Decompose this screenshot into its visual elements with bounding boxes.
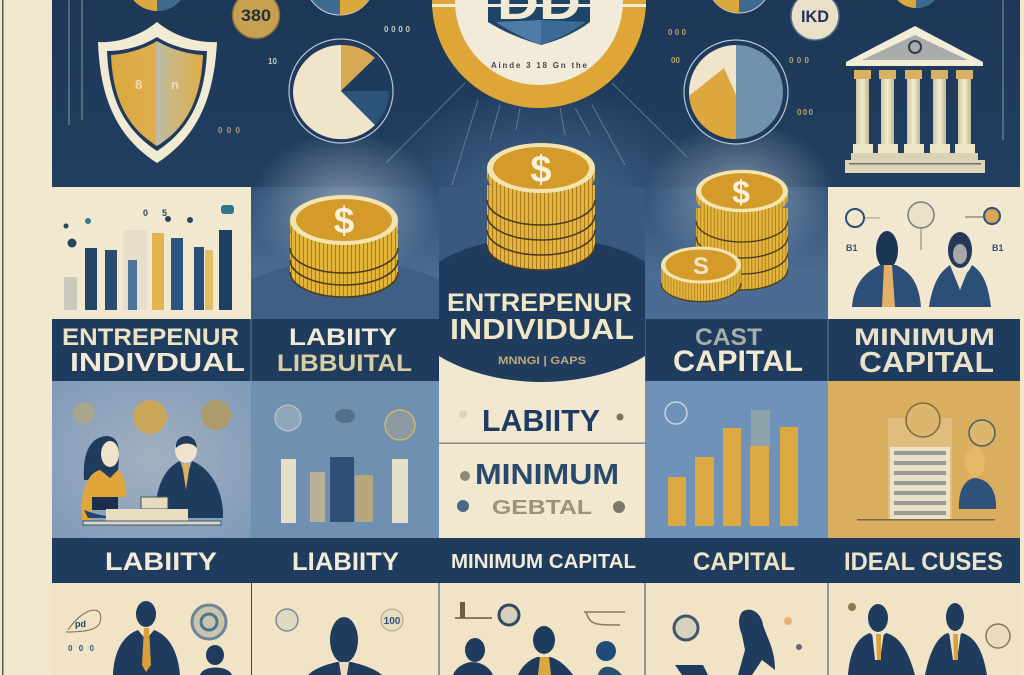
panel: rising bar chart [645,381,828,538]
icon: small pie top middle-left [305,0,375,15]
label: liabiity: LIABIITY [292,548,399,576]
label: entrepenur individual: INDIVDUAL [70,347,245,377]
figure: presenter: 000 [68,644,95,653]
heading: entrepenur individual [447,289,634,367]
panel: bar chart row 1 [52,187,251,318]
icon: badge 380 [232,0,280,38]
icon: badge IKD: IKD [801,7,829,26]
small labels right: 000 [797,108,814,117]
heading: entrepenur individual: MNNGI | GAPS [498,355,586,367]
figure: single person [276,609,403,675]
central seal: Ainde 3 18 Gn the [491,61,588,70]
label: liability libbuital: LIBBUITAL [277,350,412,377]
figure: team of three [453,602,625,675]
small labels right: 00 [671,56,680,65]
panel: person pair row 1: B1 [992,243,1004,253]
icon: small pie top right-centre [707,0,771,13]
label: liability libbuital: LABIITY [289,324,397,351]
central seal [432,0,646,108]
icon: badge 380: 380 [241,6,271,25]
panel: label row 1 [52,319,1020,381]
panel: bar chart row 1: 05 [143,208,167,218]
panel: gold document scene [828,381,1020,538]
rays from central seal [386,83,687,185]
figure: handshake [848,603,1010,675]
label: cast capital: CAST [695,324,762,351]
cell dividers [251,319,828,381]
pie chart left [289,39,393,143]
panel: coin stack left: $ [334,200,355,241]
small labels left: 0000 [384,25,411,34]
icon: small pie top right [890,0,942,8]
label: liability libbuital [277,324,412,377]
label: entrepenur individual: ENTREPENUR [62,324,239,351]
icon: small pie top left [126,0,188,11]
panel: label row 2 [52,538,1020,584]
small labels left [218,25,411,135]
small labels left: 10 [268,57,277,66]
panel: centre column [439,143,645,538]
icon: temple [845,26,985,173]
panel: coin stack right: S [693,253,709,280]
text: labiity: LABIITY [482,403,600,438]
label: minimum capital: MINIMUM [854,324,995,351]
label: cast capital: CAPITAL [673,345,803,378]
pie chart right [684,40,788,144]
icon: shield: 8 n [135,77,179,92]
text: minimum gebtal [475,459,619,519]
figure: woman with laptop [674,610,802,675]
figure: presenter [66,601,232,675]
heading: entrepenur individual: ENTREPENUR [447,289,632,317]
figure: single person: 100 [384,616,401,627]
label: minimum capital: CAPITAL [859,347,994,379]
decorative vertical rules [69,0,1003,140]
panel: top header [52,0,1020,335]
cell backgrounds row 1 [250,120,835,319]
small labels right: 000 [668,28,687,37]
label: labiity: LABIITY [105,548,217,576]
figure: presenter: pd [75,619,86,629]
panel: faded chart [251,381,439,538]
panel: meeting scene [52,381,251,538]
text: minimum gebtal: GEBTAL [492,497,592,519]
icon: badge IKD [791,0,839,40]
heading: entrepenur individual: INDIVIDUAL [450,314,634,346]
panel: coin stack right [645,170,828,319]
panel: person pair row 1: B1 [846,243,858,253]
label: ideal cuses: IDEAL CUSES [844,548,1003,576]
panel: coin stack right: $ [732,174,750,210]
panel: person pair row 1 [828,187,1020,318]
label: entrepenur individual [62,324,245,377]
small labels right [668,28,814,117]
label: minimum capital: MINIMUM CAPITAL [451,551,636,573]
panel: bottom row [52,583,1020,675]
label: cast capital [673,324,803,378]
label: minimum capital [854,324,995,379]
small labels right: 000 [789,56,810,65]
icon: shield [98,22,217,163]
small labels left: 0 0 0 [218,126,241,135]
panel: centre column: $ [530,149,552,191]
label: capital: CAPITAL [693,548,795,576]
text: minimum gebtal: MINIMUM [475,459,619,491]
panel: coin stack left [251,195,439,319]
